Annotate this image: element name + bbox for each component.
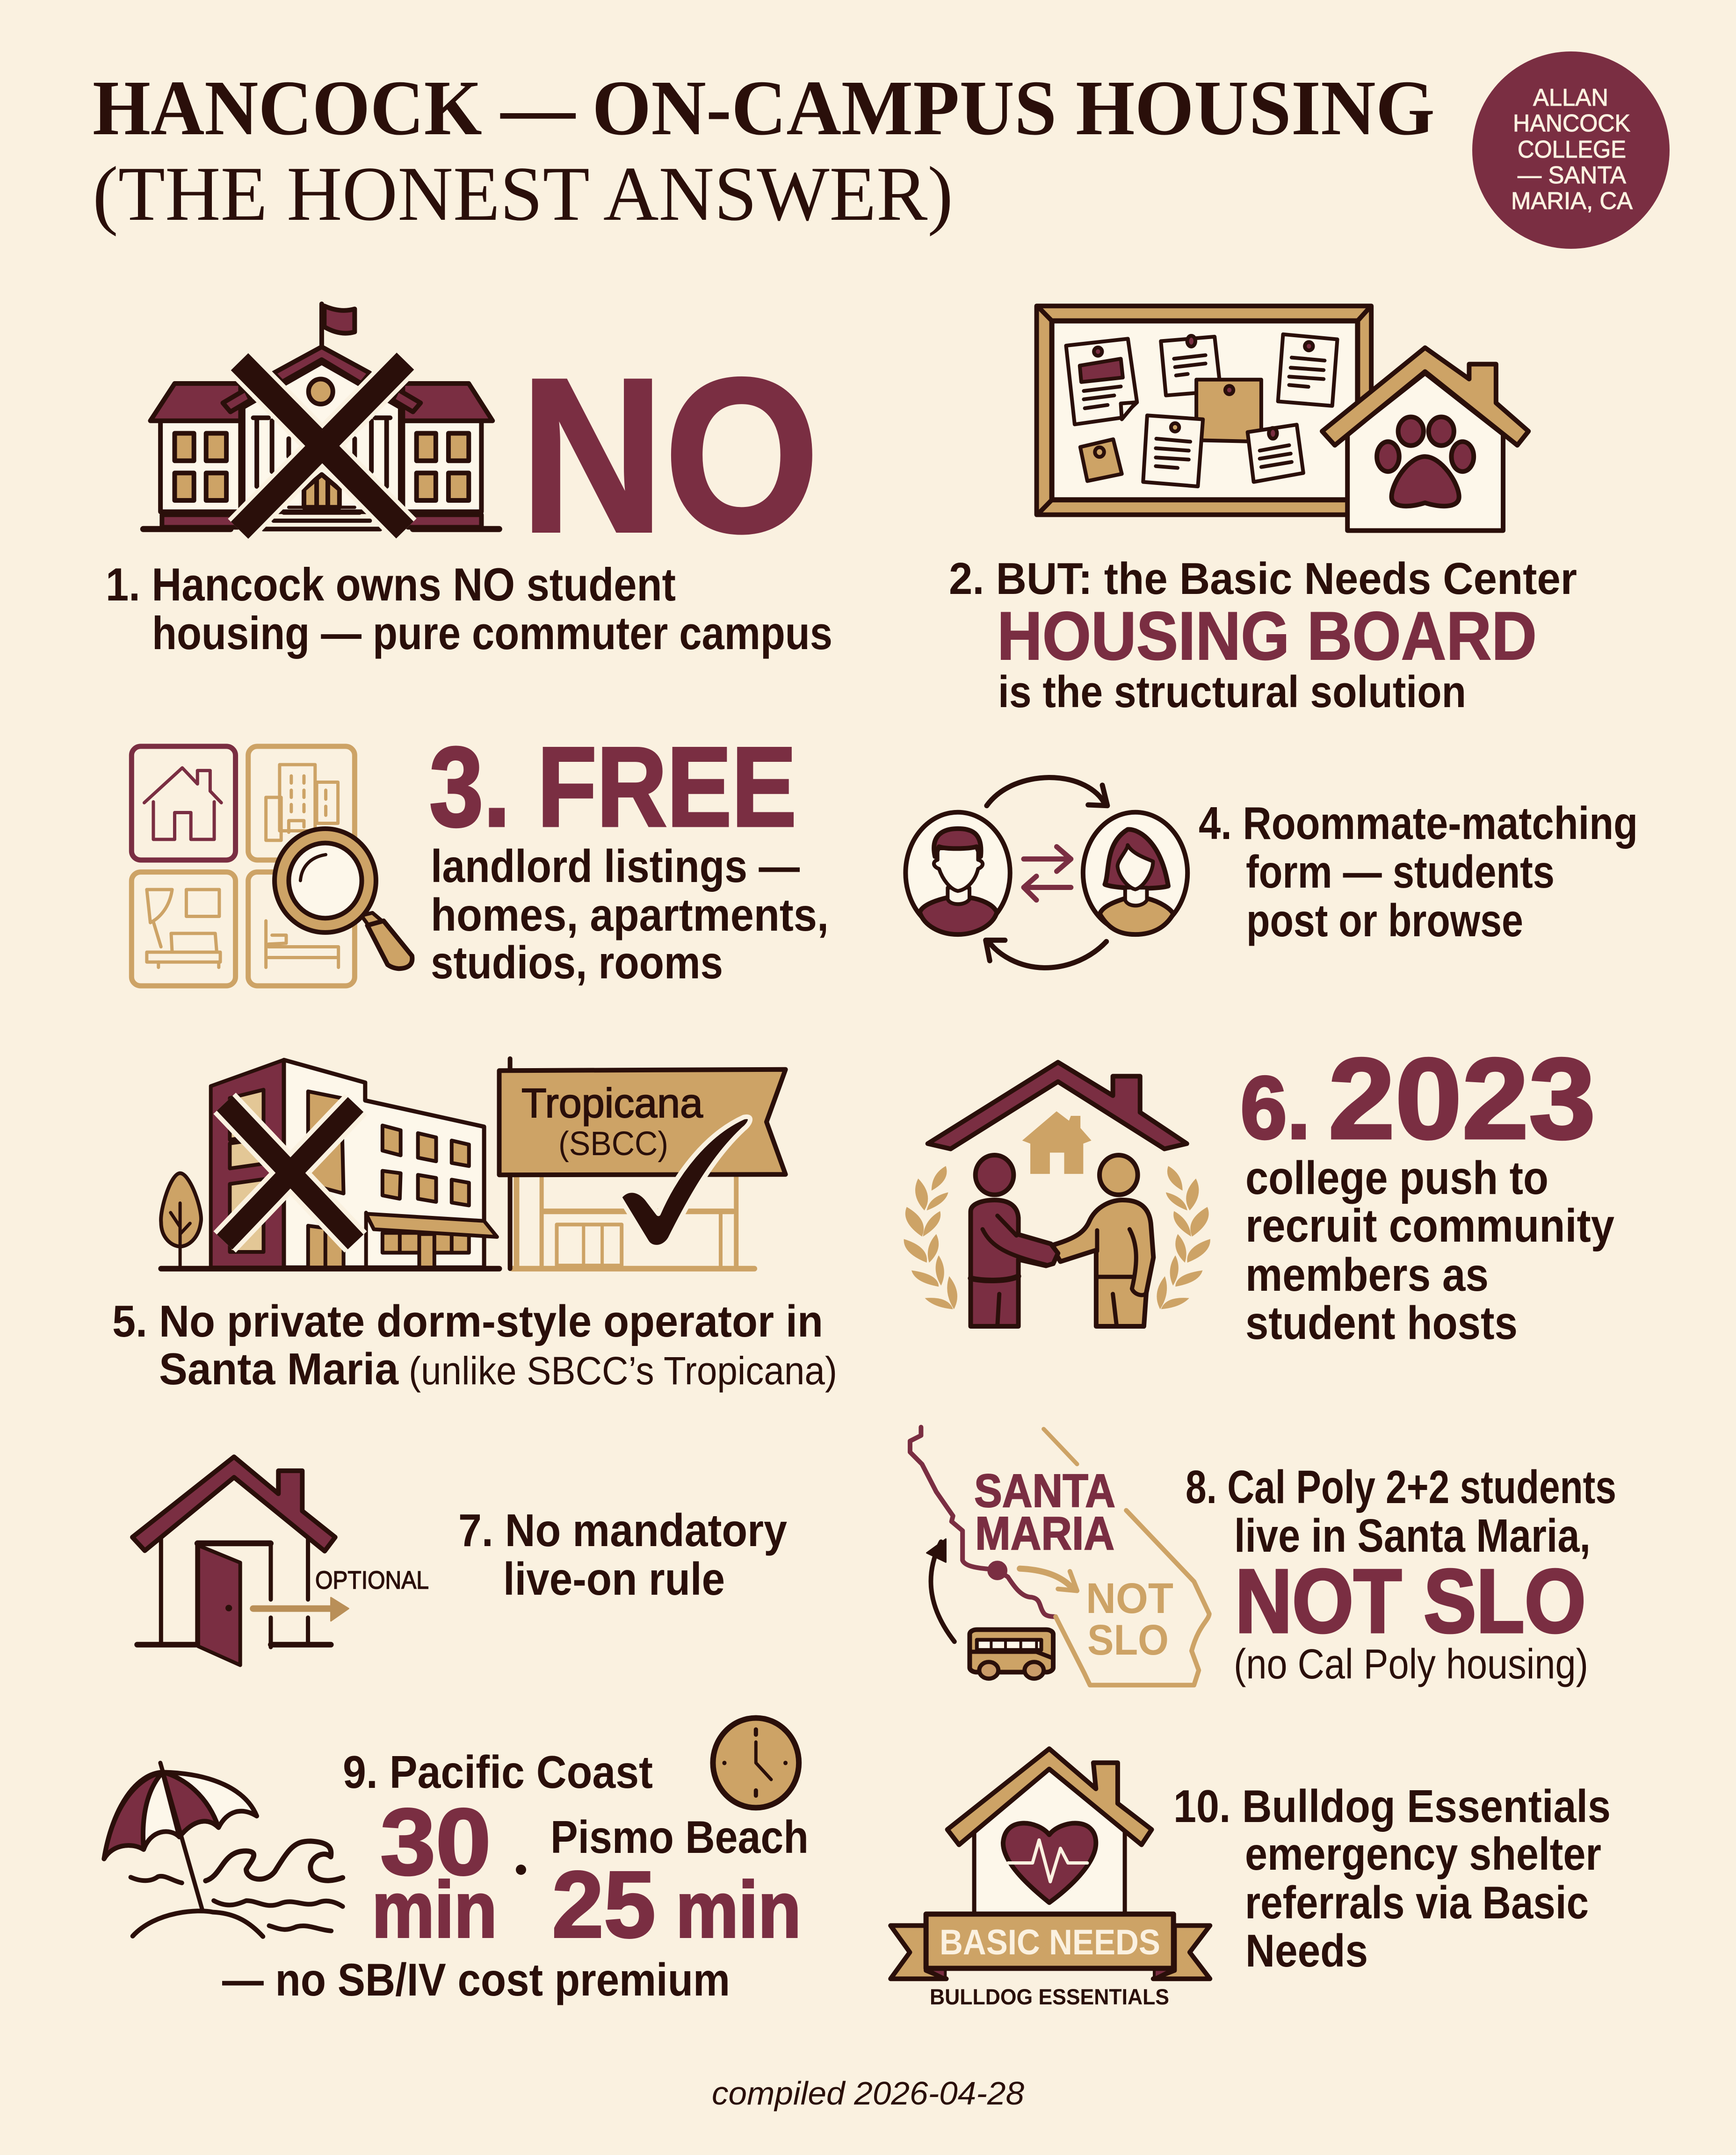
stat: 30 min bbox=[372, 1789, 497, 1954]
text: item 2: 2. BUT: the Basic Needs Center bbox=[949, 554, 1577, 604]
stat: 25 min: min bbox=[676, 1866, 801, 1954]
sign text: Tropicana: Tropicana bbox=[521, 1080, 703, 1126]
panel: item 4 bbox=[905, 777, 1638, 968]
text: cost note: — no SB/IV cost premium bbox=[222, 1954, 730, 2005]
heading: 6. 2023: 2023 bbox=[1328, 1034, 1596, 1163]
text: item 7 bbox=[458, 1504, 787, 1605]
badge: college name: HANCOCK bbox=[1513, 110, 1630, 137]
text: item 8: 8. Cal Poly 2+2 students bbox=[1186, 1461, 1616, 1513]
big word: NO: NO bbox=[520, 333, 819, 578]
text: item 6: student hosts bbox=[1245, 1297, 1518, 1349]
text: item 4: post or browse bbox=[1246, 895, 1523, 946]
text: item 10: emergency shelter bbox=[1245, 1828, 1601, 1880]
map labels bbox=[974, 1465, 1173, 1664]
footer: compile date: compiled 2026-04-28 bbox=[712, 2075, 1024, 2112]
highlight: housing board: HOUSING BOARD bbox=[997, 598, 1537, 674]
title: ON-CAMPUS HOUSING bbox=[592, 65, 1435, 152]
map labels: MARIA bbox=[975, 1507, 1114, 1560]
label: optional: OPTIONAL bbox=[315, 1566, 429, 1594]
panel: item 1 bbox=[106, 304, 832, 659]
text: item 10: 10. Bulldog Essentials bbox=[1173, 1780, 1611, 1832]
icon: roommate matching bbox=[905, 777, 1187, 968]
icon: listing tiles with magnifier bbox=[131, 746, 412, 986]
heading: 3. FREE: 3. FREE bbox=[429, 724, 796, 850]
badge: college name: ALLAN bbox=[1533, 84, 1608, 111]
panel: item 2 bbox=[949, 306, 1577, 717]
stat: 30 min: 30 bbox=[380, 1789, 491, 1895]
panel: item 8 bbox=[910, 1427, 1616, 1688]
sign text: Tropicana: (SBCC) bbox=[558, 1125, 668, 1163]
text: item 4: form — students bbox=[1246, 846, 1555, 897]
caption: bulldog essentials: BULLDOG ESSENTIALS bbox=[930, 1984, 1169, 2009]
text: item 6 bbox=[1245, 1152, 1614, 1349]
text: item 4 bbox=[1199, 797, 1638, 946]
ribbon text: basic needs: BASIC NEEDS bbox=[940, 1923, 1160, 1962]
text: item 5: Santa Maria bbox=[159, 1344, 399, 1394]
icon: housing board and paw house bbox=[1037, 306, 1528, 530]
panel: item 7 bbox=[132, 1457, 787, 1665]
panel: item 10 bbox=[890, 1749, 1611, 2009]
separator dot bbox=[516, 1865, 526, 1875]
map labels: NOT bbox=[1086, 1575, 1173, 1622]
text: item 5: 5. No private dorm-style operator in bbox=[112, 1296, 823, 1346]
icon: beach umbrella and waves bbox=[104, 1763, 343, 1937]
text: item 6: members as bbox=[1245, 1249, 1489, 1301]
title bbox=[93, 65, 1435, 237]
heading: 6. 2023: 6. bbox=[1240, 1058, 1310, 1157]
badge: college name: COLLEGE bbox=[1518, 136, 1626, 163]
text: item 5 bbox=[112, 1296, 837, 1394]
text: item 10: Needs bbox=[1245, 1925, 1368, 1976]
icon: handshake under roof with laurels bbox=[904, 1062, 1210, 1326]
text: item 1: housing — pure commuter campus bbox=[152, 607, 832, 659]
title: HANCOCK — bbox=[93, 65, 576, 152]
text: item 9 heading: 9. Pacific Coast bbox=[343, 1746, 653, 1798]
text: item 8: (no Cal Poly housing) bbox=[1234, 1641, 1588, 1688]
text: item 1: 1. Hancock owns NO student bbox=[106, 558, 676, 610]
icon: California map with bus bbox=[910, 1427, 1209, 1685]
text: item 6: college push to bbox=[1245, 1152, 1548, 1204]
icon: clock bbox=[713, 1718, 799, 1808]
highlight: not SLO: NOT SLO bbox=[1235, 1550, 1586, 1651]
icon: campus building crossed out bbox=[143, 304, 499, 530]
stat: 30 min: min bbox=[372, 1866, 497, 1954]
text: item 1 bbox=[106, 558, 832, 659]
panel: item 9 bbox=[104, 1718, 809, 2005]
text: item 8 bbox=[1186, 1461, 1616, 1688]
text: item 10 bbox=[1173, 1780, 1611, 1976]
badge: college name bbox=[1472, 51, 1670, 249]
icon: house with heart and ribbon bbox=[890, 1749, 1210, 1979]
text: item 7: live-on rule bbox=[503, 1553, 725, 1605]
stat: 25 min bbox=[552, 1851, 801, 1957]
text: item 3 bbox=[431, 840, 829, 988]
text: item 8: live in Santa Maria, bbox=[1234, 1510, 1591, 1562]
text: item 2 bbox=[949, 554, 1577, 717]
text: item 10: referrals via Basic bbox=[1245, 1877, 1589, 1928]
text: item 3: landlord listings — bbox=[431, 840, 800, 892]
text: item 4: 4. Roommate-matching bbox=[1199, 797, 1638, 849]
text: item 7: 7. No mandatory bbox=[458, 1504, 787, 1556]
panel: item 3 bbox=[131, 724, 829, 988]
panel: item 5 bbox=[112, 1059, 837, 1394]
text: item 5: (unlike SBCC’s Tropicana) bbox=[409, 1349, 837, 1393]
text: item 2: is the structural solution bbox=[998, 667, 1466, 717]
map labels: SANTA bbox=[974, 1465, 1115, 1517]
text: item 6: recruit community bbox=[1245, 1200, 1614, 1252]
icon: house with open door bbox=[132, 1457, 348, 1665]
text: item 3: studios, rooms bbox=[431, 937, 723, 988]
map labels: SLO bbox=[1087, 1616, 1169, 1664]
text: item 3: homes, apartments, bbox=[431, 889, 829, 940]
badge: college name: MARIA, CA bbox=[1511, 188, 1633, 215]
icon: crossed dorm and approved Tropicana sign bbox=[161, 1059, 786, 1269]
panel: item 6 bbox=[904, 1034, 1614, 1349]
title: (THE HONEST ANSWER) bbox=[93, 151, 953, 237]
label: Pismo Beach: Pismo Beach bbox=[550, 1811, 809, 1863]
sign text: Tropicana bbox=[521, 1080, 703, 1163]
stat: 25 min: 25 bbox=[552, 1851, 656, 1957]
badge: college name: — SANTA bbox=[1518, 162, 1626, 189]
